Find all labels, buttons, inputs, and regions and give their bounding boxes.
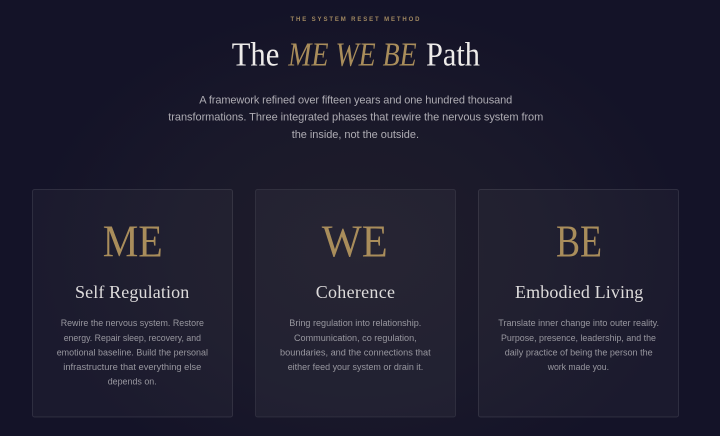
eyebrow label: THE SYSTEM RESET METHOD <box>290 17 420 23</box>
intro paragraph <box>168 94 543 141</box>
heading: Self Regulation: Self Regulation <box>75 282 189 302</box>
WE description: Communication, co regulation, <box>294 333 417 344</box>
BE monogram: BE <box>556 217 602 267</box>
WE description <box>280 318 431 373</box>
card background <box>256 190 456 417</box>
BE description: work made you. <box>547 362 609 373</box>
title <box>232 37 480 74</box>
heading: Embodied Living: Embodied Living <box>515 282 643 302</box>
BE description: Translate inner change into outer reality. <box>498 318 659 329</box>
intro paragraph: transformations. Three integrated phases that rewire the nervous system from <box>168 112 543 124</box>
ME description: energy. Repair sleep, recovery, and <box>64 333 201 344</box>
title: ME WE BE <box>287 37 417 74</box>
card background <box>478 190 678 417</box>
panel: WE <box>256 190 456 417</box>
WE description: either feed your system or drain it. <box>288 362 423 373</box>
WE description: boundaries, and the connections that <box>280 347 431 358</box>
WE monogram: WE <box>322 217 388 267</box>
ME description <box>57 318 208 388</box>
ME description: infrastructure that everything else <box>63 362 201 373</box>
ME description: Rewire the nervous system. Restore <box>61 318 204 329</box>
heading: Coherence: Coherence <box>316 282 395 302</box>
title: The <box>232 37 279 74</box>
title: Path <box>426 37 480 74</box>
BE description: daily practice of being the person the <box>505 347 653 358</box>
ME description: depends on. <box>108 377 157 388</box>
intro paragraph: A framework refined over fifteen years and one hundred thousand <box>199 94 512 106</box>
panel: ME <box>32 190 232 417</box>
card background <box>32 190 232 417</box>
panel: BE <box>478 190 678 417</box>
ME monogram: ME <box>103 217 163 267</box>
intro paragraph: the inside, not the outside. <box>292 129 419 141</box>
WE description: Bring regulation into relationship. <box>289 318 421 329</box>
ME description: emotional baseline. Build the personal <box>57 347 208 358</box>
BE description <box>498 318 659 373</box>
BE description: Purpose, presence, leadership, and the <box>501 333 656 344</box>
